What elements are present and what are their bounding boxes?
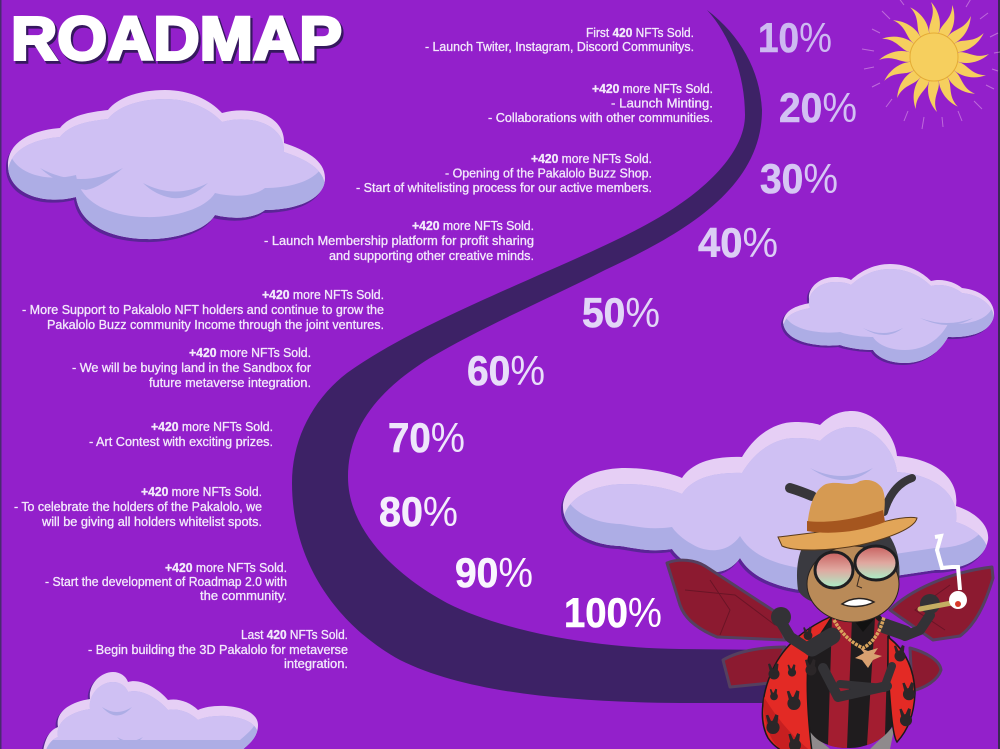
milestone 20: - Launch Minting. xyxy=(611,96,713,110)
milestone 20: +420 more NFTs Sold. xyxy=(592,82,713,96)
70%: 70% xyxy=(388,414,465,461)
shirt xyxy=(808,615,893,748)
milestone 30 xyxy=(356,152,652,195)
milestone 40: +420 more NFTs Sold. xyxy=(412,219,534,233)
title: ROADMAP xyxy=(13,7,344,75)
milestone 10: First 420 NFTs Sold. xyxy=(586,26,694,40)
milestone 80: +420 more NFTs Sold. xyxy=(141,485,262,499)
milestone 80: - To celebrate the holders of the Pakalolo, we xyxy=(14,500,262,514)
hands xyxy=(771,594,940,627)
cloud: top left xyxy=(6,90,325,248)
milestone 50: Pakalolo Buzz community Income through the joint ventures. xyxy=(47,318,384,332)
milestone 100 xyxy=(88,628,348,671)
icon: sun xyxy=(862,0,1000,129)
milestone 90: the community. xyxy=(200,589,287,603)
100%: 100% xyxy=(564,589,662,636)
head xyxy=(797,530,899,622)
character: ladybug mascot xyxy=(667,478,993,749)
wing veins xyxy=(685,580,950,635)
milestone 60: future metaverse integration. xyxy=(149,376,311,390)
milestone 50 xyxy=(22,288,384,332)
milestone text xyxy=(14,26,713,671)
milestone 70 xyxy=(89,420,273,449)
skirt xyxy=(808,725,895,749)
milestone 40: - Launch Membership platform for profit sharing xyxy=(264,234,534,248)
sunglasses xyxy=(815,546,897,588)
milestone 60: - We will be buying land in the Sandbox for xyxy=(72,361,311,375)
milestone 20: - Collaborations with other communities. xyxy=(488,111,713,125)
milestone 30: +420 more NFTs Sold. xyxy=(531,152,652,166)
milestone 50: +420 more NFTs Sold. xyxy=(262,288,384,302)
milestone 80 xyxy=(14,485,262,529)
sun flames xyxy=(879,2,989,112)
20%: 20% xyxy=(779,84,857,131)
milestone 60: +420 more NFTs Sold. xyxy=(189,346,311,360)
milestone 100: - Begin building the 3D Pakalolo for metaverse xyxy=(88,643,348,657)
roadmap road xyxy=(292,10,770,703)
shell right xyxy=(888,637,915,742)
shell spots xyxy=(766,627,816,749)
90%: 90% xyxy=(455,549,533,596)
milestone 70: - Art Contest with exciting prizes. xyxy=(89,435,273,449)
10%: 10% xyxy=(758,14,832,61)
wings xyxy=(667,560,993,691)
percent labels xyxy=(379,14,857,636)
milestone 40 xyxy=(264,219,534,263)
milestone 30: - Opening of the Pakalolo Buzz Shop. xyxy=(445,166,652,180)
sun rays faint xyxy=(862,0,1000,129)
milestone 100: integration. xyxy=(284,657,348,671)
milestone 90: +420 more NFTs Sold. xyxy=(165,561,287,575)
cloud: bottom left xyxy=(41,672,258,749)
sun disk xyxy=(910,33,958,81)
necklace xyxy=(834,617,884,668)
50%: 50% xyxy=(582,289,660,336)
milestone 70: +420 more NFTs Sold. xyxy=(151,420,273,434)
shell left xyxy=(762,616,832,749)
milestone 40: and supporting other creative minds. xyxy=(329,249,534,263)
milestone 10 xyxy=(425,26,694,54)
milestone 80: will be giving all holders whitelist spots. xyxy=(41,515,262,529)
cloud: middle right xyxy=(781,264,994,368)
title: ROADMAP xyxy=(11,4,342,72)
40%: 40% xyxy=(698,219,778,266)
arms xyxy=(781,615,930,697)
milestone 100: Last 420 NFTs Sold. xyxy=(241,628,348,642)
hat xyxy=(778,480,917,550)
milestone 90 xyxy=(45,561,287,603)
30%: 30% xyxy=(760,155,838,202)
smoke xyxy=(935,536,967,609)
cloud: large lower right xyxy=(561,411,988,606)
milestone 30: - Start of whitelisting process for our active members. xyxy=(356,181,652,195)
joint xyxy=(920,602,957,609)
80%: 80% xyxy=(379,488,458,535)
milestone 60 xyxy=(72,346,311,390)
antennae xyxy=(790,478,912,512)
60%: 60% xyxy=(467,347,545,394)
milestone 20 xyxy=(488,82,713,125)
milestone 90: - Start the development of Roadmap 2.0 with xyxy=(45,575,287,589)
milestone 10: - Launch Twiter, Instagram, Discord Communitys. xyxy=(425,40,694,54)
milestone 50: - More Support to Pakalolo NFT holders and continue to grow the xyxy=(22,303,384,317)
